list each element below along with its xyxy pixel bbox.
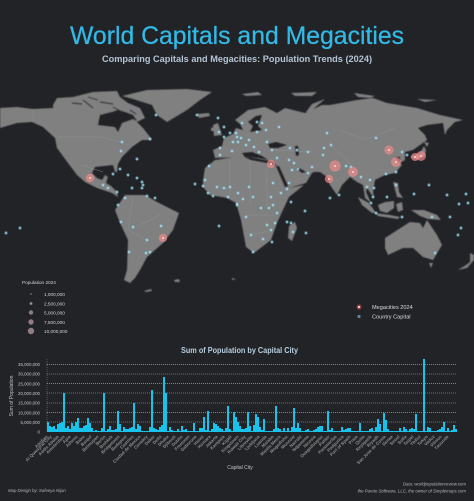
x axis labels: Castries [119,434,135,450]
credit: map design: Map Design by: Safeeya Nijan [8,488,66,493]
subtitle: Comparing Capitals and Megacities: Population Trends (2024) [102,54,372,65]
x axis labels: Abidjan [34,434,49,449]
x axis labels: Praia [348,434,359,445]
x axis labels: Dhaka [157,434,170,447]
x axis labels: Sofia [397,434,408,445]
legend: point types [356,304,413,320]
x axis labels: Budapest [110,434,128,452]
chart title: Sum of Population by Capital City [181,346,298,355]
x axis labels: Seoul [389,434,401,446]
x axis labels: Belmopan [81,434,100,453]
x axis labels: Palikir [318,434,331,447]
x axis labels: Kigali [221,434,233,446]
x axis labels: Sanaa [381,434,394,447]
legend: population size: 7,500,000 [44,320,65,325]
x axis labels: Podgorica [326,434,345,453]
y axis labels: 25,000,000 [18,381,41,386]
x axis labels: Al Quwayrat City [24,434,53,463]
x axis labels: Bridgetown [100,434,121,455]
legend: population size: 2,500,000 [44,302,65,306]
x axis labels: Luanda [253,434,268,449]
world map [0,89,474,292]
y axis labels: 20,000,000 [18,391,41,396]
x axis labels: Tokyo [416,434,429,447]
x axis labels: Nairobi [288,434,303,448]
x axis labels: Libreville [237,434,254,451]
x axis labels: Dublin [171,434,184,447]
megacity centres [89,149,422,239]
x axis labels: Delhi [152,434,163,445]
x axis labels: Vaduz [423,434,436,447]
y axis labels: 10,000,000 [18,410,41,415]
x axis labels: Hanoi [193,434,205,446]
x axis labels: Honiara [197,434,212,449]
bars [48,359,456,432]
x axis labels: Kampala [209,434,226,451]
credit: data source: Data: worldpopulationreview.com [403,482,466,486]
y axis labels: 0 [38,430,41,435]
x axis labels: Tbilisi [409,434,422,447]
credit: data source: the Pareto Software, LLC, the owner of Simplemaps.com [358,488,466,494]
x axis labels: Malabo [260,434,275,448]
x axis labels: Nicosia [302,434,317,449]
land masses [0,89,474,292]
x axis labels: Freetown [173,434,191,452]
x axis labels: Ciudad de Mexico [112,434,142,464]
x axis labels: Jakarta [204,434,219,449]
x axis labels: Banjul [80,434,93,447]
y axis labels: 5,000,000 [20,420,41,425]
x axis labels: Taipei [402,434,415,446]
x axis labels: Ndjamena [291,434,310,453]
x axis labels: Berlin [94,434,107,447]
x axis labels: Riyadh [366,434,380,448]
x axis labels: Mogadishu [269,434,289,454]
x axis labels: Port of Spain [329,434,352,457]
x axis labels: San Jose de Costa [356,434,387,465]
x axis labels: Moscow [280,434,296,450]
y axis labels [18,362,41,435]
x axis labels: Quito [354,434,366,446]
x axis labels: Bishkek [98,434,114,450]
gridlines [47,364,457,422]
x axis labels: Addis Ababa [37,434,60,457]
x axis labels: Yaounde [433,434,450,451]
country capital markers [6,115,468,253]
y axis title: Sum of Population [9,375,15,416]
x axis labels: Paramaribo [317,434,338,455]
x axis labels: Athens [65,434,79,448]
x axis labels: Amsterdam [45,434,66,455]
legend: population size [22,280,68,334]
x axis labels: Djibouti [162,434,177,449]
x axis labels: Apia [61,434,72,444]
x axis labels: Kuwait City [226,434,247,455]
x axis labels: Kingstown [220,434,240,454]
megacity markers [86,145,426,242]
x axis labels: Reykjavik [355,434,373,452]
y axis labels: 15,000,000 [18,401,41,406]
title: World Capitals and Megacities [70,22,404,50]
x axis labels: Ljubljana [244,434,261,451]
x axis labels: Dakar [144,434,156,446]
inland and enclosed seas [72,97,306,187]
x axis labels: Vilnius [429,434,443,448]
x axis labels [24,434,450,465]
legend: point types: Megacities 2024 [372,305,413,311]
y axis labels: 30,000,000 [18,372,41,377]
country borders [33,109,395,240]
x axis title: Capital City [227,465,253,471]
x axis labels: Manila Metro [259,434,282,457]
legend: population size: Population 2024 [22,280,56,285]
x axis labels: Gaborone [179,434,198,452]
legend: population size: 1,000,000 [44,292,65,297]
bar chart [9,359,457,471]
credit: data source [358,482,466,494]
legend: population size: 10,000,000 [44,329,68,334]
x axis labels: Ouagadougou [299,434,324,459]
legend: population size: 5,000,000 [44,310,65,316]
x axis labels: Conakry [133,434,149,450]
y axis labels: 35,000,000 [18,362,41,367]
x axis labels: Baku [75,434,86,445]
legend: point types: Country Capital [372,314,411,320]
